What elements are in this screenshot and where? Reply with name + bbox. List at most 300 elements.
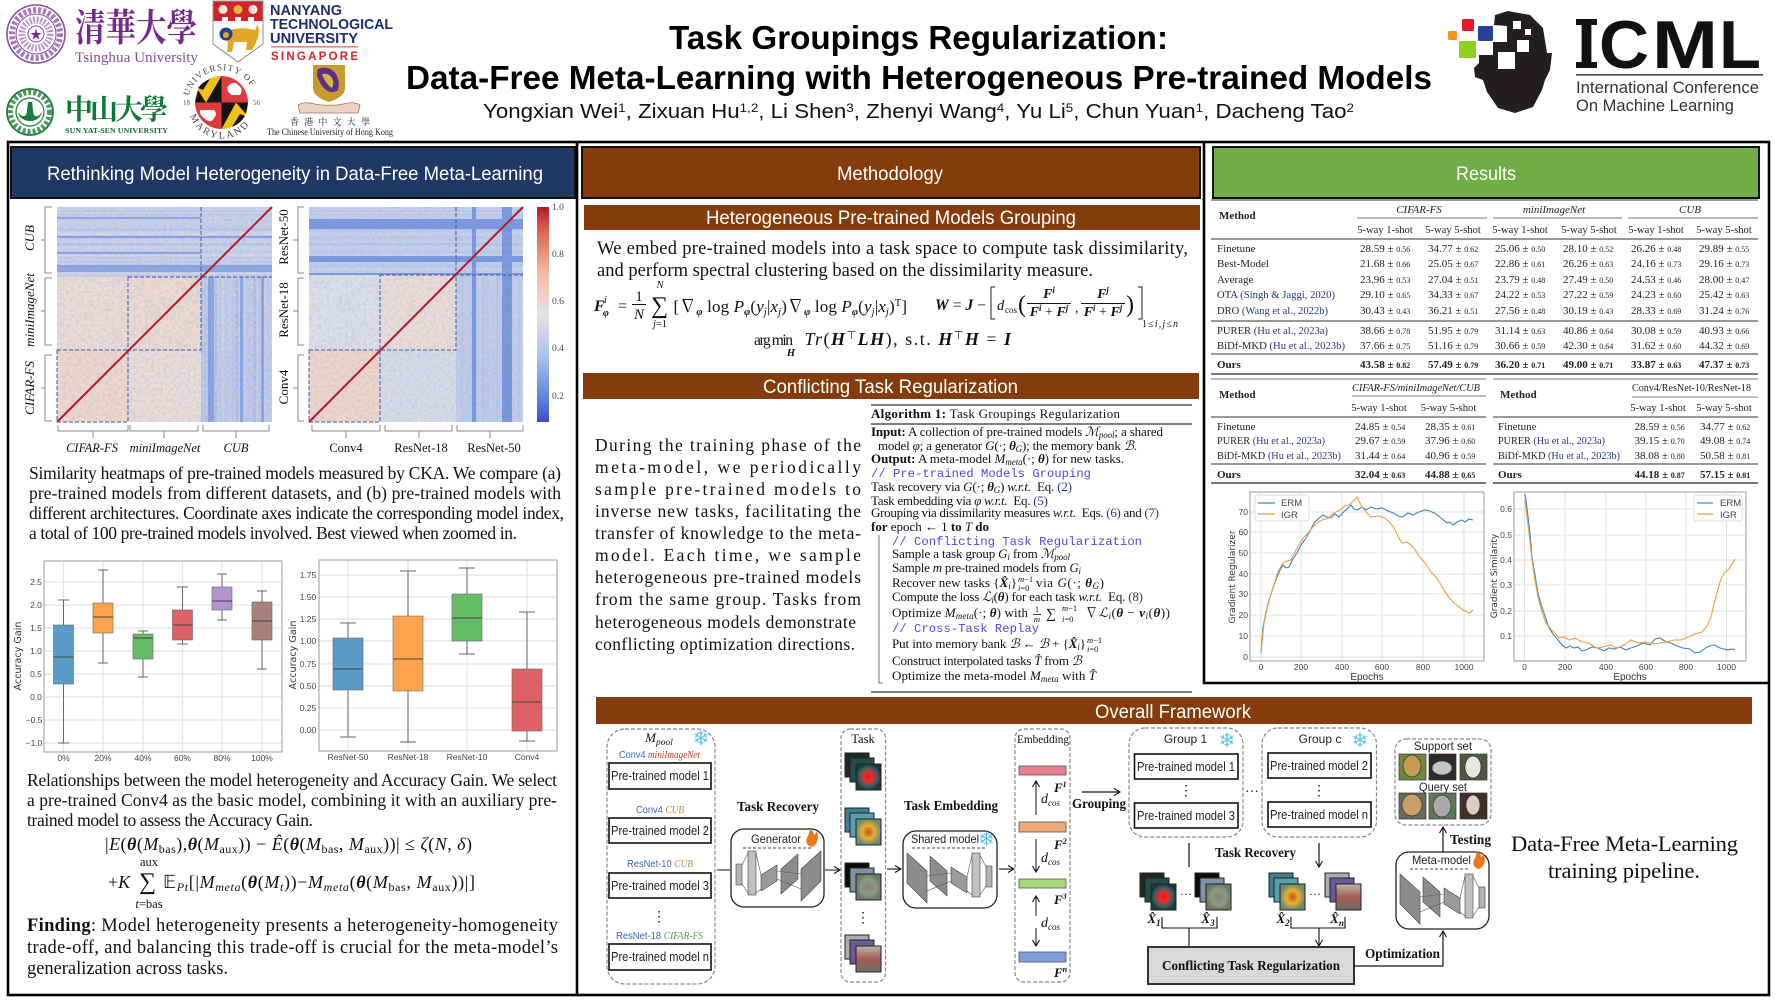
chart: box plot by heterogeneity: 40% [134, 753, 152, 763]
chart: box plot by heterogeneity: 20% [94, 753, 112, 763]
subheading: regularization: Conflicting Task Regularization [763, 377, 1018, 398]
recovered task images: X̂ [1147, 911, 1156, 926]
algorithm: Put into memory bank ℬ ← ℬ + {X̂ [892, 636, 1077, 651]
formula: dissimilarity matrix: F [1110, 305, 1120, 320]
heading: methodology: Methodology [837, 164, 943, 185]
table: single-domain results: 44.32 ± 0.69 [1699, 340, 1749, 352]
chart: box plot by architecture: 1.00 [300, 636, 317, 646]
heatmap axis brackets and labels: CUB [22, 225, 37, 251]
subheading: regularization [583, 373, 1199, 399]
embedding column: F [1054, 837, 1063, 852]
formula: dissimilarity matrix: j [1064, 303, 1069, 313]
chart: box plot by architecture: 1.75 [300, 570, 317, 580]
model pool: ❄ [693, 726, 709, 750]
algorithm: ℳ [1041, 546, 1057, 561]
logo: The Chinese University of Hong Kong: The Chinese University of Hong Kong [267, 127, 393, 137]
chart: box plot by architecture: 0.75 [300, 659, 317, 669]
table: single-domain results: 31.62 ± 0.60 [1631, 340, 1681, 352]
text: box plot caption [27, 770, 557, 830]
table: single-domain results: 47.37 ± 0.73 [1699, 359, 1749, 371]
formula: generalization bound: t=bas [135, 897, 163, 911]
formula: generalization bound: ))| ≤ [383, 834, 420, 855]
formula: dissimilarity matrix: F [1056, 305, 1066, 320]
table: cross-architecture results: 49.08 ± 0.74 [1700, 435, 1750, 447]
chart: box plot by architecture: ResNet-18 [388, 752, 429, 762]
formula: task embedding: y [754, 297, 764, 316]
formula: task embedding: x [770, 297, 779, 316]
shared model [903, 827, 997, 908]
table: single-domain results: Best-Model [1217, 258, 1269, 270]
title: Data-Free Meta-Learning with Heterogeneous Pre-trained Models [406, 59, 1432, 96]
recovered task images: … [1180, 884, 1192, 898]
formula: spectral clustering objective: ), s.t. H [886, 329, 952, 349]
chart: gradient similarity: 600 [1639, 662, 1653, 672]
heatmap axis brackets and labels [22, 207, 523, 455]
formula: dissimilarity matrix: i [1052, 285, 1055, 295]
chart: gradient regularizer: ERM [1281, 498, 1302, 509]
algorithm: i [1007, 552, 1010, 562]
task images: ⋮ [856, 911, 870, 926]
table: single-domain results: 24.22 ± 0.53 [1495, 289, 1545, 301]
chart: gradient similarity: 0.2 [1500, 606, 1512, 616]
chart: gradient similarity: Epochs [1613, 672, 1647, 683]
authors: , Dacheng Tao [1203, 101, 1347, 123]
formula: spectral clustering objective: H [964, 329, 980, 349]
formula: generalization bound: ζ(N, δ) [420, 834, 472, 854]
formula: task embedding: j [776, 307, 781, 318]
heatmap axis brackets and labels: ResNet-50 [276, 209, 291, 265]
table: single-domain results: 25.42 ± 0.63 [1699, 289, 1749, 301]
chart: box plot by architecture: ResNet-10 [447, 752, 488, 762]
chart: box plot by architecture [288, 560, 557, 762]
text: finding [27, 916, 559, 979]
authors: 1 [618, 101, 626, 115]
formula: dissimilarity matrix: F [1030, 305, 1039, 320]
formula: task embedding: j=1 [651, 319, 667, 330]
table: cross-domain results: 5-way 5-shot [1421, 403, 1476, 414]
formula: generalization bound: [| [189, 872, 199, 892]
table: single-domain results: 29.16 ± 0.73 [1699, 258, 1749, 270]
table: single-domain results: 25.06 ± 0.50 [1495, 243, 1545, 255]
logo: Nanyang Technological University: UNIVERSITY [270, 30, 358, 47]
heatmap axis brackets and labels: CIFAR-FS [66, 441, 119, 455]
box: conflicting task regularization: Conflicting Task Regularization [1162, 958, 1340, 973]
table: single-domain results: Ours [1217, 359, 1242, 371]
formula: task embedding: j [762, 307, 767, 318]
meta-model [1396, 851, 1489, 929]
text: regularization description: During the training phase of the [595, 435, 861, 455]
formula: generalization bound: ( [350, 872, 356, 893]
table: single-domain results: 23.79 ± 0.48 [1495, 274, 1545, 286]
group 1 [1129, 728, 1243, 837]
table: single-domain results: 27.22 ± 0.59 [1563, 289, 1613, 301]
formula: generalization bound: |E(θ(M [105, 834, 158, 854]
formula: dissimilarity matrix: j [1104, 285, 1109, 295]
algorithm: Recover new tasks {X̂ [892, 575, 1008, 590]
title [406, 19, 1432, 96]
generator [731, 829, 824, 907]
text: finding: trade-off, and balancing this trade-off is crucial for the meta-model’s [27, 938, 558, 958]
group c: ❄ [1352, 728, 1368, 752]
arrow and label: grouping: Grouping [1072, 796, 1126, 811]
text: pipeline caption: Data-Free Meta-Learning [1511, 831, 1738, 856]
text: regularization description: heterogeneous pre-trained models [595, 567, 861, 587]
formula: task embedding: x [877, 297, 886, 316]
table: cross-architecture results: 34.77 ± 0.62 [1700, 421, 1750, 433]
authors: 2 [1347, 101, 1354, 115]
formula: generalization bound: aux [432, 880, 451, 894]
panel: overall framework [596, 697, 1752, 984]
embedding column: cos [1048, 922, 1060, 932]
embedding column: Embedding [1017, 732, 1069, 746]
table: cross-domain results [1211, 379, 1486, 483]
table: single-domain results: 33.87 ± 0.63 [1631, 359, 1681, 371]
table: cross-domain results: Method [1219, 389, 1256, 401]
table: single-domain results: 30.43 ± 0.43 [1360, 305, 1410, 317]
model pool: ResNet-10 CUB [627, 859, 693, 870]
table: single-domain results: 37.66 ± 0.75 [1360, 340, 1410, 352]
formula: task embedding: φ [804, 307, 810, 318]
table: single-domain results: 27.56 ± 0.48 [1495, 305, 1545, 317]
heading: results [1213, 147, 1759, 198]
table: single-domain results [1211, 200, 1758, 374]
chart: gradient similarity: 400 [1599, 662, 1613, 672]
table: single-domain results: 25.05 ± 0.67 [1428, 258, 1478, 270]
authors: 1,2 [740, 101, 759, 115]
chart: gradient regularizer: 10 [1239, 631, 1248, 641]
support and query sets [1395, 739, 1491, 825]
logo: University of Maryland: UNIVERSITY OF [183, 64, 256, 95]
recovered task images: X̂ [1276, 911, 1285, 926]
text: heatmap caption: Similarity heatmaps of pre-trained models measured by CKA. We compare (a) [29, 463, 561, 483]
formula: dissimilarity matrix: F [1097, 287, 1106, 302]
formula: task embedding: N [633, 307, 645, 323]
algorithm: G [1093, 581, 1100, 591]
task images: Task [851, 732, 875, 746]
algorithm: // Cross-Task Replay [892, 622, 1039, 636]
model pool: Pre-trained model 1 [611, 769, 709, 783]
ellipsis between groups: … [1245, 781, 1259, 796]
formula: generalization bound: ∑ [139, 869, 156, 895]
table: cross-domain results: 40.96 ± 0.59 [1425, 450, 1475, 462]
chart: gradient similarity: 0.5 [1500, 530, 1512, 540]
embedding column: 2 [1062, 837, 1067, 846]
formula: dissimilarity matrix: + [1096, 305, 1110, 320]
logo: ICML: International Conference [1576, 79, 1759, 97]
chart: gradient similarity: 800 [1679, 662, 1693, 672]
model pool: M [645, 730, 656, 745]
formula: task embedding: P [840, 297, 852, 316]
algorithm: ( [1149, 605, 1153, 620]
formula: dissimilarity matrix: 1≤i,j≤n [1142, 319, 1178, 330]
chart: gradient regularizer: 30 [1239, 589, 1248, 599]
table: cross-domain results: PURER (Hu et al., 2023a) [1217, 435, 1325, 447]
chart: gradient regularizer: 40 [1239, 569, 1248, 579]
text: heatmap caption: different architectures. Coordinate axes indicate the corresponding model index, [29, 503, 564, 523]
logo: University of Maryland [183, 64, 260, 139]
table: single-domain results: Method [1219, 210, 1256, 222]
algorithm: θ) with [990, 605, 1028, 620]
algorithm: Construct interpolated tasks T̂ from ℬ [892, 653, 1083, 668]
heading: rethinking [11, 147, 575, 198]
table: single-domain results: 31.14 ± 0.63 [1495, 325, 1545, 337]
formula: task embedding: ( [858, 297, 864, 316]
colorbar: 1.0 [552, 203, 564, 213]
chart: gradient similarity: 0.1 [1500, 631, 1512, 641]
algorithm: m−1 [1062, 603, 1077, 613]
formula: generalization bound: ))|] [451, 872, 475, 893]
table: single-domain results: OTA (Singh & Jaggi, 2020) [1217, 289, 1335, 301]
table: single-domain results: 28.10 ± 0.52 [1563, 243, 1613, 255]
table: cross-architecture results: 5-way 1-shot [1630, 403, 1686, 414]
algorithm: pool [1098, 430, 1115, 440]
chart: box plot by architecture: ResNet-50 [328, 752, 369, 762]
algorithm: ( [1112, 605, 1116, 620]
algorithm: with [1059, 668, 1089, 683]
connectors: recovered tasks to regularization [1162, 917, 1345, 946]
formula: generalization bound: aux [364, 842, 383, 856]
chart: gradient regularizer: Gradient Regularizer [1228, 530, 1238, 624]
table: single-domain results: 5-way 5-shot [1425, 225, 1481, 236]
algorithm: (·; [1023, 451, 1038, 466]
table: cross-architecture results: Ours [1498, 469, 1523, 481]
formula: dissimilarity matrix: W = J − [935, 297, 986, 314]
algorithm: Input: A collection of pre-trained models ℳ [871, 424, 1099, 439]
colorbar: 0.4 [552, 344, 564, 354]
table: single-domain results: 5-way 1-shot [1492, 225, 1548, 236]
model pool [607, 726, 715, 984]
algorithm: i [1078, 566, 1081, 576]
formula: generalization bound: , [406, 872, 416, 892]
chart: gradient similarity: Gradient Similarity [1490, 533, 1500, 618]
text: regularization description: inverse new tasks, facilitating the [595, 501, 861, 521]
algorithm: meta [1041, 674, 1059, 684]
authors: 3 [846, 101, 854, 115]
formula: task embedding: P [733, 297, 744, 316]
table: single-domain results: 40.93 ± 0.66 [1699, 325, 1749, 337]
logo: University of Maryland: 56 [253, 99, 260, 107]
chart: gradient similarity: 0.6 [1500, 504, 1512, 514]
model pool: ResNet-18 CIFAR-FS [616, 931, 703, 942]
table: single-domain results: 31.24 ± 0.76 [1699, 305, 1749, 317]
group c [1262, 728, 1376, 837]
chart: gradient regularizer: 200 [1294, 662, 1308, 672]
formula: task embedding: φ [852, 307, 858, 318]
table: single-domain results: 49.00 ± 0.71 [1563, 359, 1613, 371]
recovered task images: 2 [1284, 918, 1290, 928]
chart: gradient regularizer: 600 [1375, 662, 1389, 672]
chart: box plot by architecture: 1.25 [300, 614, 317, 624]
formula: generalization bound: )) − [238, 834, 271, 855]
logo: The Chinese University of Hong Kong [267, 65, 393, 137]
logo: Tsinghua University: Tsinghua University [75, 50, 198, 66]
formula: task embedding: 1 [635, 289, 643, 305]
table: single-domain results: 27.49 ± 0.50 [1563, 274, 1613, 286]
table: single-domain results: Finetune [1217, 243, 1256, 255]
title: Task Groupings Regularization: [669, 19, 1168, 56]
logo: Nanyang Technological University: TECHNOLOGICAL [270, 16, 393, 33]
label: task embedding: Task Embedding [904, 798, 998, 813]
table: single-domain results: 27.04 ± 0.51 [1428, 274, 1478, 286]
table: single-domain results: 42.30 ± 0.64 [1563, 340, 1613, 352]
chart: gradient regularizer: 1000 [1455, 662, 1474, 672]
formula: dissimilarity matrix: F [1084, 305, 1093, 320]
table: cross-architecture results: 50.58 ± 0.81 [1700, 450, 1750, 462]
table: single-domain results: 30.66 ± 0.59 [1495, 340, 1545, 352]
formula: task embedding: j [870, 307, 875, 318]
text: regularization description: heterogeneous models demonstrate [595, 612, 856, 632]
text: regularization description: transfer of knowledge to the meta- [595, 523, 861, 543]
text: finding: Finding: Model heterogeneity presents a heterogeneity-homogeneity [27, 916, 559, 936]
heading: results: Results [1456, 164, 1516, 185]
heatmap axis brackets and labels: CUB [224, 441, 249, 455]
embedding column: 3 [1062, 892, 1067, 901]
table: cross-architecture results: Method [1500, 389, 1537, 401]
algorithm: Output: A meta-model M [871, 451, 1005, 466]
table: cross-architecture results: Conv4/ResNet-10/ResNet-18 [1632, 382, 1751, 394]
colorbar: 0.2 [552, 392, 564, 402]
formula: dissimilarity matrix: ) [1126, 292, 1134, 318]
text: pipeline caption: training pipeline. [1548, 858, 1700, 883]
table: single-domain results: 29.89 ± 0.55 [1699, 243, 1749, 255]
panel: rethinking model heterogeneity [11, 147, 575, 979]
text: regularization description: sample pre-trained models to [595, 479, 861, 499]
heatmap axis brackets and labels: CIFAR-FS [22, 361, 37, 415]
group 1: Pre-trained model 3 [1137, 809, 1235, 823]
group c: Pre-trained model n [1270, 808, 1368, 822]
group 1: Group 1 [1164, 732, 1208, 746]
text: regularization description: from the same group. Tasks from [595, 589, 861, 609]
box: conflicting task regularization [1148, 947, 1354, 984]
chart: box plot by heterogeneity: 1.0 [30, 646, 42, 656]
formula: dissimilarity matrix: i [1039, 303, 1042, 313]
chart: gradient similarity: 0.3 [1500, 580, 1512, 590]
algorithm: ); the memory bank [1022, 438, 1124, 453]
algorithm: Grouping via dissimilarity measures w.r.t. Eqs. (6) and (7) [871, 505, 1159, 520]
algorithm: θ) for new tasks. [1038, 451, 1124, 466]
recovered task images: 1 [1156, 918, 1161, 928]
algorithm: ∑ [1046, 607, 1056, 622]
heatmap axis brackets and labels: Conv4 [276, 369, 291, 404]
logo: Sun Yat-sen University [7, 88, 168, 135]
table: single-domain results: 5-way 5-shot [1561, 225, 1617, 236]
table: cross-domain results: Finetune [1217, 421, 1256, 433]
table: single-domain results: 26.26 ± 0.48 [1631, 243, 1681, 255]
table: single-domain results: 28.59 ± 0.56 [1360, 243, 1410, 255]
chart: box plot by heterogeneity: 2.5 [30, 577, 42, 587]
table: single-domain results: BiDf-MKD (Hu et al., 2023b) [1217, 340, 1345, 352]
chart: gradient regularizer: 800 [1416, 662, 1430, 672]
formula: task embedding: log [810, 297, 841, 316]
chart: gradient regularizer: 20 [1239, 610, 1248, 620]
formula: dissimilarity matrix: j [1118, 303, 1123, 313]
formula: task embedding: φ [696, 307, 703, 318]
chart: box plot by architecture: 0.25 [300, 703, 317, 713]
text: box plot caption: Relationships between the model heterogeneity and Accuracy Gain. We select [27, 770, 557, 790]
formula: dissimilarity matrix: i [1093, 303, 1096, 313]
group c: Pre-trained model 2 [1270, 759, 1368, 773]
text: grouping description: We embed pre-trained models into a task space to compute task dissimilarity, [597, 239, 1188, 259]
formula: task embedding: ∑ [651, 293, 668, 319]
algorithm: from [1010, 546, 1041, 561]
text: pipeline caption [1511, 831, 1738, 883]
table: single-domain results: 36.20 ± 0.71 [1495, 359, 1545, 371]
shared model: Shared model [911, 832, 979, 846]
chart: gradient similarity: IGR [1720, 510, 1737, 521]
support and query sets: Support set [1414, 739, 1473, 753]
formula: task embedding: ] [901, 297, 907, 316]
text: heatmap caption: pre-trained models from different datasets, and (b) pre-trained models with [29, 483, 561, 503]
chart: gradient regularizer: 70 [1239, 507, 1248, 517]
chart: gradient regularizer: 400 [1335, 662, 1349, 672]
formula: task embedding: | [767, 297, 770, 316]
panel: results [1211, 147, 1759, 683]
chart: box plot by heterogeneity: 100% [251, 753, 273, 763]
recovered task images: n [1339, 918, 1344, 928]
model pool: ⋮ [652, 910, 666, 925]
table: single-domain results: 24.23 ± 0.60 [1631, 289, 1681, 301]
algorithm: w.r.t. Eq. (2) [1007, 479, 1072, 494]
table: cross-architecture results [1493, 379, 1758, 483]
algorithm: meta [1005, 457, 1023, 467]
algorithm: Algorithm 1: Task Groupings Regularization [871, 406, 1120, 421]
formula: dissimilarity matrix: cos [1005, 305, 1017, 315]
formula: generalization bound: 𝔼 [163, 872, 176, 892]
colorbar: 0.8 [552, 250, 564, 260]
generator: Generator [751, 832, 801, 846]
chart: gradient similarity [1490, 492, 1746, 683]
text: box plot caption: a pre-trained Conv4 as the basic model, combining it with an auxiliary pre- [27, 790, 557, 810]
label: task recovery (groups): Task Recovery [1215, 845, 1296, 860]
algorithm: // Pre-trained Models Grouping [871, 467, 1091, 481]
recovered task images: 3 [1209, 918, 1215, 928]
arrow: tasks to shared model [887, 868, 901, 870]
algorithm: ) [1100, 575, 1104, 590]
table: single-domain results: PURER (Hu et al., 2023a) [1217, 325, 1328, 337]
embedding column: 1 [1063, 780, 1067, 789]
text: regularization description: conflicting optimization directions. [595, 634, 855, 654]
formula: spectral clustering objective: LH [857, 329, 885, 349]
chart: box plot by architecture: Conv4 [515, 752, 540, 762]
formula: generalization bound: t [280, 880, 284, 894]
model pool: Pre-trained model 2 [611, 824, 709, 838]
algorithm: m−1 [1018, 574, 1033, 584]
algorithm: ) [1000, 479, 1007, 494]
chart: gradient regularizer: Epochs [1350, 672, 1384, 683]
table: single-domain results: miniImageNet [1523, 204, 1586, 216]
table: cross-architecture results: 39.15 ± 0.70 [1634, 435, 1685, 447]
chart: box plot by heterogeneity: 0% [57, 753, 70, 763]
formula: task embedding: φ [603, 308, 609, 319]
formula: dissimilarity matrix: F [1043, 287, 1052, 302]
text: regularization description: meta-model, we periodically [595, 457, 861, 477]
recovered task images: … [1309, 884, 1321, 898]
heatmap axis brackets and labels: ResNet-50 [467, 441, 521, 455]
table: cross-domain results: 31.44 ± 0.64 [1355, 450, 1405, 462]
algorithm: G [994, 485, 1001, 495]
text: heatmap caption: a total of 100 pre-trained models involved. Best viewed when zoomed in. [29, 523, 517, 543]
arrows: generator in and out [717, 869, 840, 871]
formula: generalization bound: M [416, 872, 433, 892]
algorithm: ; a shared [1114, 424, 1164, 439]
table: cross-architecture results: BiDf-MKD (Hu et al., 2023b) [1498, 450, 1620, 462]
formula: task embedding: = [618, 298, 627, 315]
algorithm: for epoch ← 1 to T do [871, 519, 989, 534]
chart: gradient similarity: 1000 [1717, 662, 1736, 672]
subheading: grouping: Heterogeneous Pre-trained Models Grouping [706, 208, 1076, 229]
formula: task embedding: F [593, 298, 605, 315]
text: finding: generalization across tasks. [27, 959, 228, 979]
